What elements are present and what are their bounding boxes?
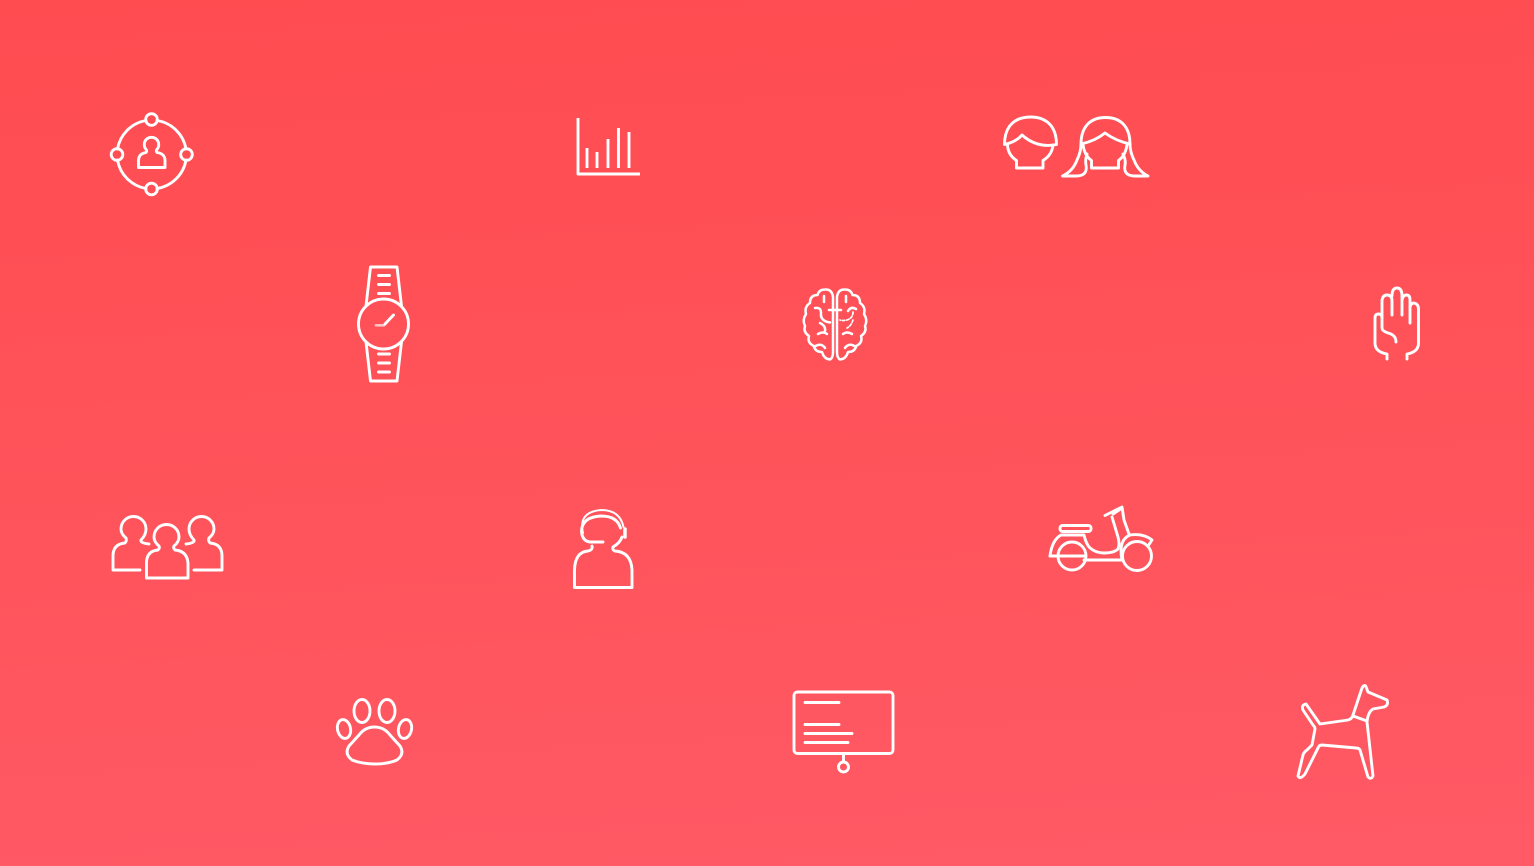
- icon: standing dog: [1298, 686, 1388, 778]
- icon: man and woman heads: [1004, 117, 1148, 176]
- icon: person with headset: [574, 510, 632, 588]
- icon: presentation board: [794, 692, 893, 772]
- icon: brain: [804, 289, 866, 360]
- icon: group of three people: [113, 516, 222, 578]
- icon: person in network ring: [111, 114, 192, 195]
- icon: raised hand: [1375, 288, 1418, 359]
- icon: bar chart: [578, 118, 640, 174]
- icon: scooter: [1050, 507, 1152, 570]
- icon: paw print: [336, 700, 413, 764]
- icon: wrist watch: [358, 267, 408, 381]
